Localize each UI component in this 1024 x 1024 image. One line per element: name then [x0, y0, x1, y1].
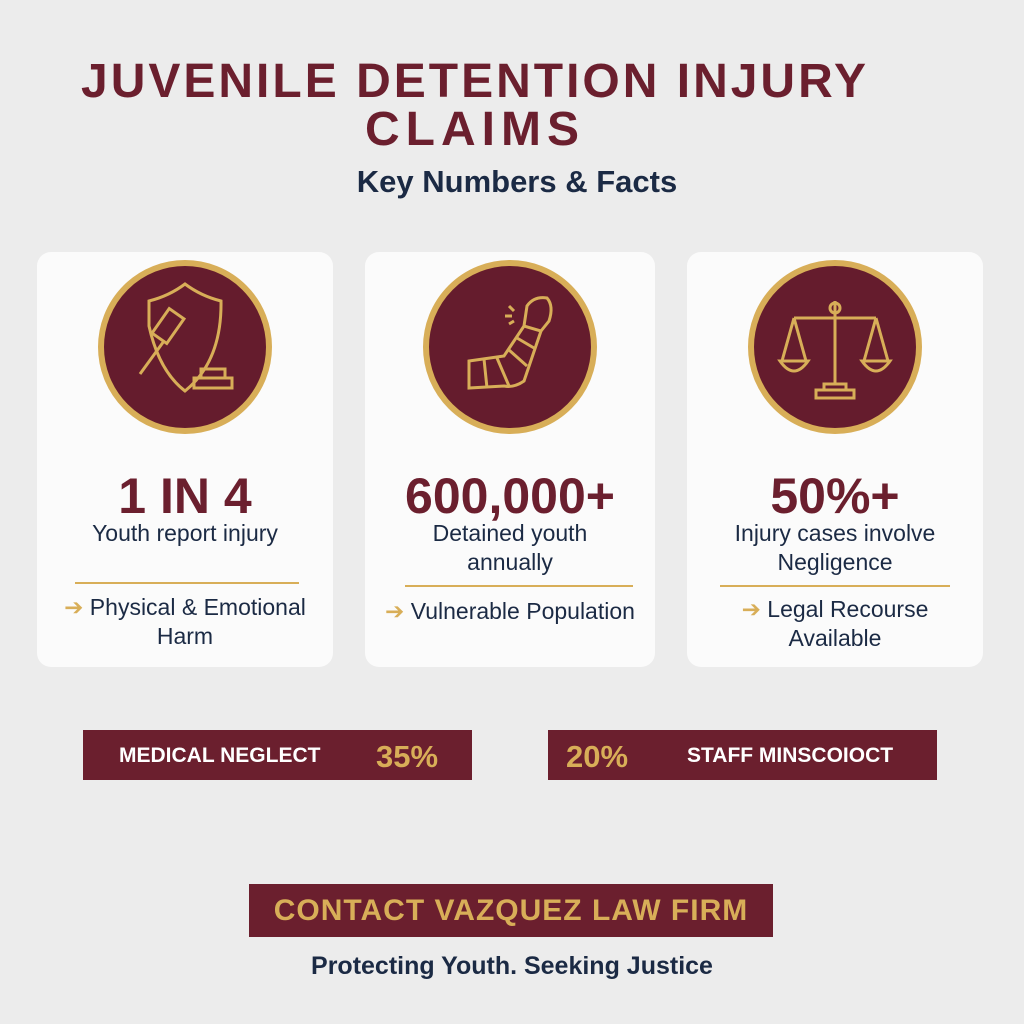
bar: staff misconduct: STAFF MINSCOIOCT — [687, 744, 893, 767]
tagline: Protecting Youth. Seeking Justice — [311, 952, 713, 980]
title: JUVENILE DETENTION INJURY — [81, 55, 869, 108]
stat: 600,000+ — [405, 468, 615, 524]
panel: card 1: ➔ Physical & Emotional — [64, 594, 306, 620]
panel: card 3: Negligence — [777, 549, 893, 575]
bar: medical neglect: 35% — [376, 739, 438, 774]
bar: medical neglect — [83, 730, 472, 780]
panel: card 2: annually — [467, 549, 553, 575]
panel: card 3 — [687, 252, 983, 667]
panel: card 1: Youth report injury — [92, 520, 278, 546]
stat: 1 IN 4 — [118, 468, 252, 524]
icon: shield gavel — [98, 260, 272, 434]
panel: card 1 — [37, 252, 333, 667]
title: CLAIMS — [365, 103, 585, 156]
call to action: CONTACT VAZQUEZ LAW FIRM — [274, 894, 748, 927]
panel: card 2: ➔ Vulnerable Population — [385, 598, 635, 624]
bar: staff misconduct — [548, 730, 937, 780]
icon: bandaged arm — [423, 260, 597, 434]
panel: card 2 — [365, 252, 655, 667]
subtitle: Key Numbers & Facts — [357, 164, 677, 199]
panel: card 3: ➔ Legal Recourse — [742, 596, 928, 622]
icon: scales — [748, 260, 922, 434]
call to action — [249, 884, 773, 937]
stat: 50%+ — [770, 468, 900, 524]
bar: staff misconduct: 20% — [566, 739, 628, 774]
bar: medical neglect: MEDICAL NEGLECT — [119, 744, 320, 767]
panel: card 2: Detained youth — [433, 520, 587, 546]
title — [81, 55, 869, 156]
panel: card 1: Harm — [157, 623, 213, 649]
panel: card 3: Available — [789, 625, 881, 651]
panel: card 3: Injury cases involve — [735, 520, 935, 546]
